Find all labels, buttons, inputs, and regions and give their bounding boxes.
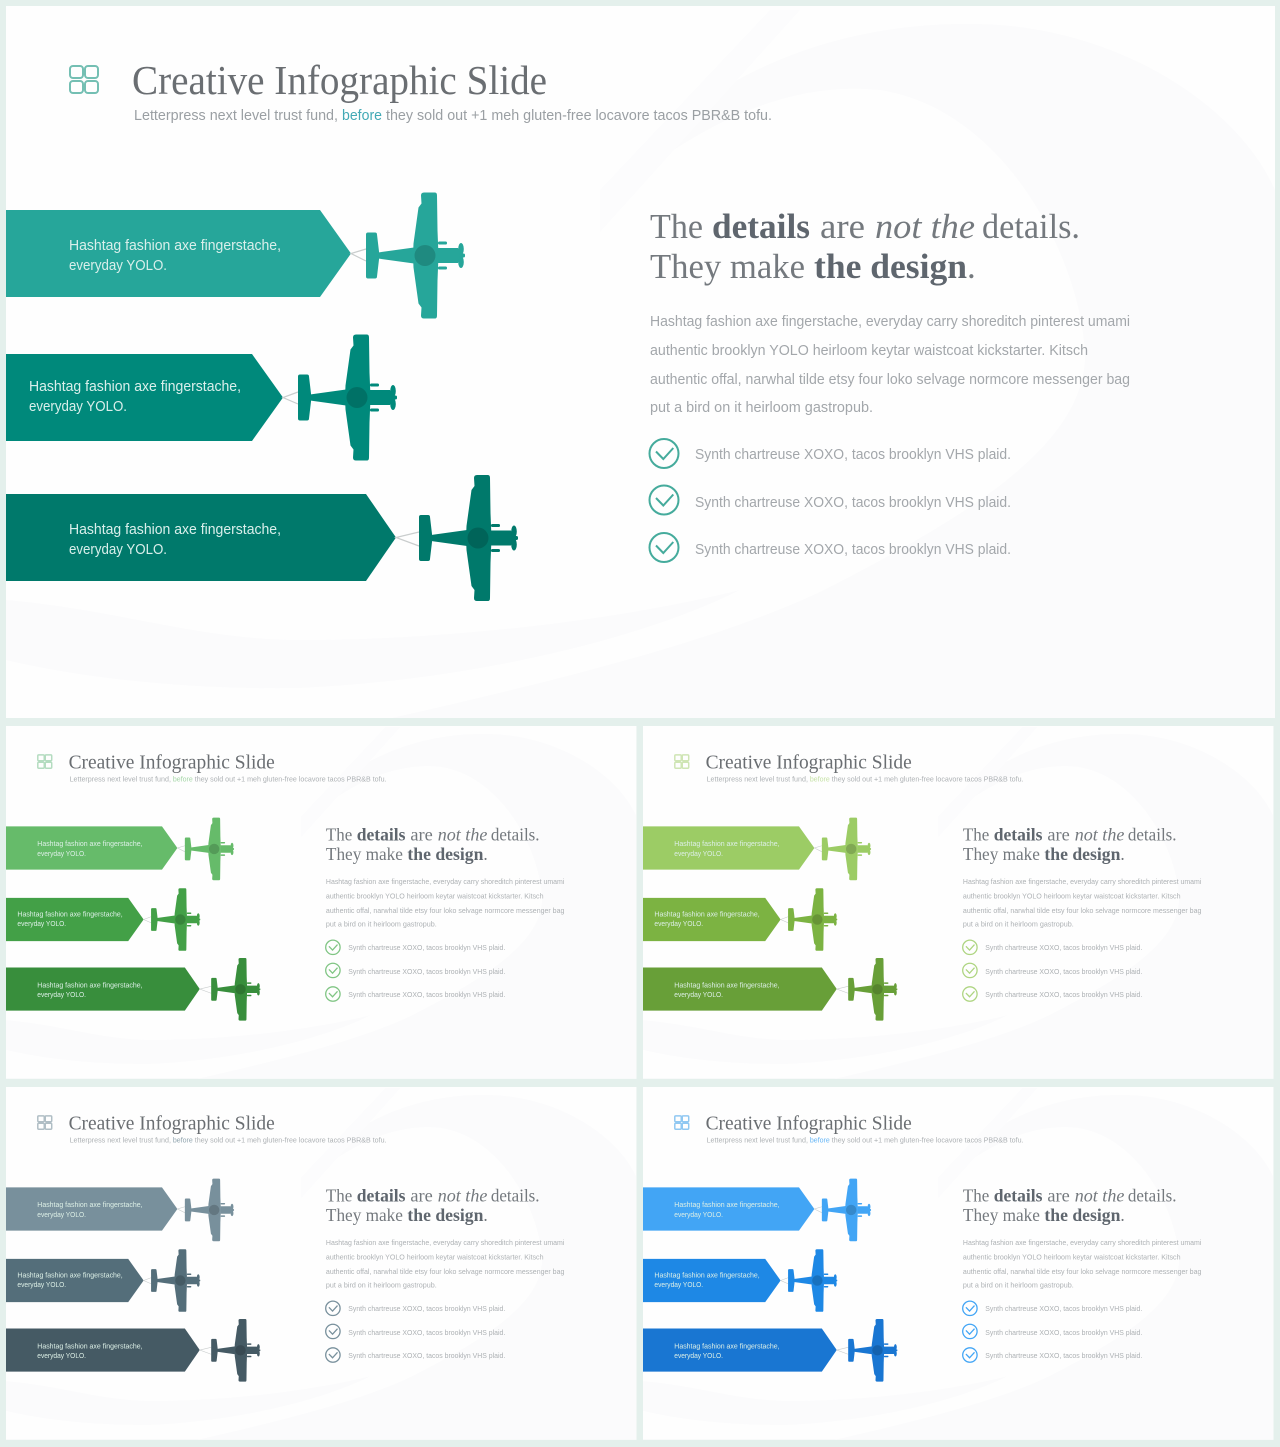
body paragraph: put a bird on it heirloom gastropub. (963, 1281, 1074, 1290)
body paragraph: put a bird on it heirloom gastropub. (650, 400, 873, 416)
checklist: Synth chartreuse XOXO, tacos brooklyn VHS plaid. (985, 943, 1142, 952)
banner 3 with plane: everyday YOLO. (37, 990, 86, 999)
banner 2 with plane: Hashtag fashion axe fingerstache, (29, 378, 241, 395)
heading: the design (1044, 1206, 1121, 1225)
banner 3 with plane: everyday YOLO. (37, 1351, 86, 1360)
subtitle: they sold out +1 meh gluten-free locavore tacos PBR&B tofu. (195, 1136, 387, 1145)
checklist: Synth chartreuse XOXO, tacos brooklyn VHS plaid. (348, 990, 505, 999)
heading: not the (438, 1186, 488, 1205)
panel: blue-grey slide (6, 1087, 636, 1440)
banner 1 with plane: Hashtag fashion axe fingerstache, (37, 1200, 143, 1209)
subtitle: Letterpress next level trust fund, (707, 775, 808, 784)
body paragraph (963, 1238, 1202, 1290)
banner 1 with plane: Hashtag fashion axe fingerstache, (674, 839, 780, 848)
heading (650, 207, 1080, 286)
subtitle: they sold out +1 meh gluten-free locavore tacos PBR&B tofu. (195, 775, 387, 784)
heading: the design (407, 1206, 484, 1225)
heading: details (357, 825, 406, 844)
checklist: Synth chartreuse XOXO, tacos brooklyn VHS plaid. (348, 1351, 505, 1360)
body paragraph: Hashtag fashion axe fingerstache, everyday carry shoreditch pinterest umami (963, 1238, 1202, 1247)
banner 2 with plane: everyday YOLO. (654, 919, 703, 928)
heading: not the (1075, 825, 1125, 844)
checklist: Synth chartreuse XOXO, tacos brooklyn VHS plaid. (695, 495, 1011, 511)
heading: details (994, 825, 1043, 844)
subtitle: Letterpress next level trust fund, (70, 1136, 171, 1145)
banner 3 with plane (6, 958, 260, 1021)
banner 3 with plane: Hashtag fashion axe fingerstache, (674, 1341, 780, 1350)
heading: details. (491, 1186, 540, 1205)
banner 3 with plane (6, 475, 518, 601)
banner 3 with plane: everyday YOLO. (674, 1351, 723, 1360)
subtitle (707, 1136, 1024, 1145)
checklist: Synth chartreuse XOXO, tacos brooklyn VHS plaid. (348, 1304, 505, 1313)
icon: four-square grid (675, 755, 689, 768)
heading: details. (1128, 825, 1177, 844)
checklist: Synth chartreuse XOXO, tacos brooklyn VHS plaid. (695, 542, 1011, 558)
heading (326, 825, 540, 864)
body paragraph: authentic brooklyn YOLO heirloom keytar waistcoat kickstarter. Kitsch (326, 1252, 544, 1261)
heading: They make (326, 1206, 403, 1225)
heading: . (483, 1206, 488, 1225)
body paragraph: put a bird on it heirloom gastropub. (963, 920, 1074, 929)
body paragraph (326, 1238, 565, 1290)
panel: green slide (6, 726, 636, 1079)
body paragraph: put a bird on it heirloom gastropub. (326, 1281, 437, 1290)
heading: They make (963, 845, 1040, 864)
body paragraph: Hashtag fashion axe fingerstache, everyday carry shoreditch pinterest umami (963, 877, 1202, 886)
body paragraph (326, 877, 565, 929)
banner 2 with plane (6, 888, 200, 951)
banner 1 with plane: Hashtag fashion axe fingerstache, (674, 1200, 780, 1209)
banner 3 with plane: Hashtag fashion axe fingerstache, (37, 980, 143, 989)
banner 2 with plane (643, 888, 837, 951)
subtitle: before (810, 775, 830, 784)
checklist (650, 439, 1011, 562)
title: Creative Infographic Slide (69, 1113, 275, 1135)
body paragraph: put a bird on it heirloom gastropub. (326, 920, 437, 929)
body paragraph: authentic offal, narwhal tilde etsy four loko selvage normcore messenger bag (963, 1267, 1201, 1276)
heading: . (1120, 845, 1125, 864)
checklist: Synth chartreuse XOXO, tacos brooklyn VHS plaid. (695, 447, 1011, 463)
heading: details (357, 1186, 406, 1205)
subtitle: Letterpress next level trust fund, (134, 108, 338, 124)
heading: details. (982, 207, 1080, 246)
banner 1 with plane: Hashtag fashion axe fingerstache, (69, 237, 281, 254)
heading (963, 825, 1177, 864)
banner 1 with plane: everyday YOLO. (37, 1210, 86, 1219)
title: Creative Infographic Slide (69, 752, 275, 774)
checklist: Synth chartreuse XOXO, tacos brooklyn VHS plaid. (985, 1304, 1142, 1313)
subtitle: before (173, 1136, 193, 1145)
subtitle: they sold out +1 meh gluten-free locavore tacos PBR&B tofu. (832, 775, 1024, 784)
panel: large teal slide (6, 6, 1275, 718)
banner 3 with plane: everyday YOLO. (674, 990, 723, 999)
checklist: Synth chartreuse XOXO, tacos brooklyn VHS plaid. (348, 967, 505, 976)
checklist (963, 940, 1142, 1001)
heading: They make (650, 247, 805, 286)
panel: light green slide (643, 726, 1273, 1079)
body paragraph (963, 877, 1202, 929)
heading (963, 1186, 1177, 1225)
body paragraph (650, 314, 1130, 416)
banner 2 with plane (6, 334, 397, 460)
checklist: Synth chartreuse XOXO, tacos brooklyn VHS plaid. (985, 967, 1142, 976)
banner 3 with plane: Hashtag fashion axe fingerstache, (69, 521, 281, 538)
subtitle (70, 775, 387, 784)
checklist: Synth chartreuse XOXO, tacos brooklyn VHS plaid. (348, 943, 505, 952)
heading: not the (438, 825, 488, 844)
banner 2 with plane (643, 1249, 837, 1312)
subtitle (707, 775, 1024, 784)
heading: details. (491, 825, 540, 844)
subtitle: Letterpress next level trust fund, (70, 775, 171, 784)
checklist: Synth chartreuse XOXO, tacos brooklyn VHS plaid. (985, 990, 1142, 999)
banner 1 with plane: everyday YOLO. (69, 257, 167, 274)
banner 2 with plane: Hashtag fashion axe fingerstache, (654, 909, 760, 918)
body paragraph: Hashtag fashion axe fingerstache, everyday carry shoreditch pinterest umami (326, 877, 565, 886)
subtitle (70, 1136, 387, 1145)
panel: blue slide (643, 1087, 1273, 1440)
heading: are (820, 207, 865, 246)
subtitle: before (342, 108, 382, 124)
subtitle (134, 108, 772, 124)
body paragraph: authentic brooklyn YOLO heirloom keytar waistcoat kickstarter. Kitsch (650, 343, 1088, 359)
banner 3 with plane (6, 1319, 260, 1382)
title: Creative Infographic Slide (706, 752, 912, 774)
subtitle: they sold out +1 meh gluten-free locavore tacos PBR&B tofu. (386, 108, 772, 124)
banner 2 with plane: Hashtag fashion axe fingerstache, (654, 1270, 760, 1279)
icon: four-square grid (70, 66, 98, 93)
body paragraph: authentic offal, narwhal tilde etsy four loko selvage normcore messenger bag (650, 372, 1130, 388)
heading: are (410, 1186, 433, 1205)
body paragraph: authentic offal, narwhal tilde etsy four loko selvage normcore messenger bag (963, 906, 1201, 915)
checklist: Synth chartreuse XOXO, tacos brooklyn VHS plaid. (985, 1328, 1142, 1337)
heading: details (994, 1186, 1043, 1205)
body paragraph: authentic offal, narwhal tilde etsy four loko selvage normcore messenger bag (326, 906, 564, 915)
checklist (326, 1301, 505, 1362)
banner 3 with plane: Hashtag fashion axe fingerstache, (37, 1341, 143, 1350)
heading (326, 1186, 540, 1225)
heading: not the (1075, 1186, 1125, 1205)
heading: details. (1128, 1186, 1177, 1205)
banner 1 with plane: everyday YOLO. (674, 849, 723, 858)
body paragraph: Hashtag fashion axe fingerstache, everyday carry shoreditch pinterest umami (326, 1238, 565, 1247)
banner 2 with plane: everyday YOLO. (17, 1280, 66, 1289)
heading: details (712, 207, 810, 246)
banner 1 with plane: everyday YOLO. (37, 849, 86, 858)
heading: . (1120, 1206, 1125, 1225)
heading: The (963, 1186, 990, 1205)
banner 2 with plane: Hashtag fashion axe fingerstache, (17, 1270, 123, 1279)
heading: the design (814, 247, 967, 286)
banner 1 with plane (643, 1179, 871, 1241)
banner 2 with plane: everyday YOLO. (17, 919, 66, 928)
heading: . (483, 845, 488, 864)
banner 1 with plane (6, 1179, 234, 1241)
banner 1 with plane: everyday YOLO. (674, 1210, 723, 1219)
heading: The (326, 825, 353, 844)
title: Creative Infographic Slide (706, 1113, 912, 1135)
heading: are (1047, 825, 1070, 844)
title: Creative Infographic Slide (132, 57, 547, 103)
checklist: Synth chartreuse XOXO, tacos brooklyn VHS plaid. (985, 1351, 1142, 1360)
checklist: Synth chartreuse XOXO, tacos brooklyn VHS plaid. (348, 1328, 505, 1337)
body paragraph: authentic brooklyn YOLO heirloom keytar waistcoat kickstarter. Kitsch (963, 891, 1181, 900)
body paragraph: authentic offal, narwhal tilde etsy four loko selvage normcore messenger bag (326, 1267, 564, 1276)
banner 3 with plane: everyday YOLO. (69, 541, 167, 558)
banner 1 with plane (643, 818, 871, 880)
checklist (326, 940, 505, 1001)
heading: The (326, 1186, 353, 1205)
banner 1 with plane (6, 192, 465, 318)
banner 2 with plane: everyday YOLO. (654, 1280, 703, 1289)
heading: are (1047, 1186, 1070, 1205)
subtitle: before (173, 775, 193, 784)
heading: . (967, 247, 976, 286)
heading: The (650, 207, 703, 246)
banner 2 with plane: everyday YOLO. (29, 398, 127, 415)
banner 1 with plane: Hashtag fashion axe fingerstache, (37, 839, 143, 848)
heading: The (963, 825, 990, 844)
banner 3 with plane (643, 1319, 897, 1382)
heading: the design (407, 845, 484, 864)
banner 2 with plane (6, 1249, 200, 1312)
icon: four-square grid (38, 1116, 52, 1129)
banner 2 with plane: Hashtag fashion axe fingerstache, (17, 909, 123, 918)
heading: They make (326, 845, 403, 864)
icon: four-square grid (38, 755, 52, 768)
subtitle: they sold out +1 meh gluten-free locavore tacos PBR&B tofu. (832, 1136, 1024, 1145)
body paragraph: authentic brooklyn YOLO heirloom keytar waistcoat kickstarter. Kitsch (326, 891, 544, 900)
heading: are (410, 825, 433, 844)
heading: They make (963, 1206, 1040, 1225)
banner 1 with plane (6, 818, 234, 880)
body paragraph: authentic brooklyn YOLO heirloom keytar waistcoat kickstarter. Kitsch (963, 1252, 1181, 1261)
icon: four-square grid (675, 1116, 689, 1129)
checklist (963, 1301, 1142, 1362)
heading: the design (1044, 845, 1121, 864)
banner 3 with plane (643, 958, 897, 1021)
body paragraph: Hashtag fashion axe fingerstache, everyday carry shoreditch pinterest umami (650, 314, 1130, 330)
subtitle: Letterpress next level trust fund, (707, 1136, 808, 1145)
banner 3 with plane: Hashtag fashion axe fingerstache, (674, 980, 780, 989)
subtitle: before (810, 1136, 830, 1145)
heading: not the (875, 207, 975, 246)
